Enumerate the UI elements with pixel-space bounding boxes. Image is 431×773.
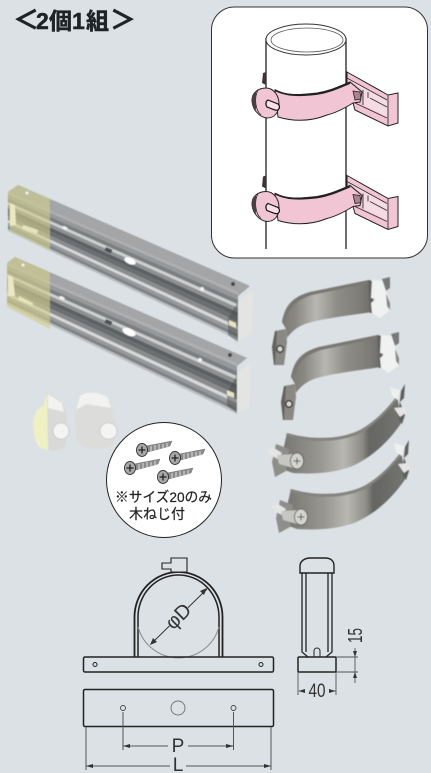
lower pink clamp <box>252 176 398 230</box>
side view drawing <box>298 558 336 672</box>
title: 2個1組: 個 <box>49 8 72 34</box>
title: 2個1組: 2 <box>36 8 49 34</box>
dimension: phi D: φD <box>161 599 196 634</box>
note text: ※サイズ20のみ <box>115 489 212 505</box>
panel: installation illustration <box>212 7 428 258</box>
pole <box>266 24 346 249</box>
icon: screws <box>124 441 205 484</box>
title: 2個1組: ＜ <box>13 5 39 35</box>
title: 2個1組: 組 <box>86 8 109 34</box>
dimension: 40: 40 <box>308 681 326 702</box>
upper pink clamp <box>252 72 398 126</box>
title: 2個1組: 1 <box>72 8 85 34</box>
bands: curved clamps with bolts <box>267 384 411 533</box>
plan view drawing <box>84 690 274 726</box>
callout circle: wood screws <box>106 422 222 538</box>
dimension: phi D <box>150 588 207 645</box>
dimension: 40 <box>298 672 336 702</box>
dimension: P <box>123 712 234 757</box>
title: 2個1組: ＞ <box>110 5 136 35</box>
callout circle: wood screws: 木ねじ付 <box>129 506 185 522</box>
dimension: 15: 15 <box>345 628 367 643</box>
dimension: L <box>86 727 271 773</box>
front view drawing <box>84 558 274 672</box>
rail: lower <box>7 257 251 414</box>
u-bands: flat-topped clamps <box>272 277 399 420</box>
end caps: plastic spacers <box>33 392 117 451</box>
title: 2個1組 <box>13 5 136 35</box>
dimension: P: P <box>172 736 184 757</box>
rail: upper <box>8 185 253 342</box>
dimension: 15 <box>336 628 367 683</box>
